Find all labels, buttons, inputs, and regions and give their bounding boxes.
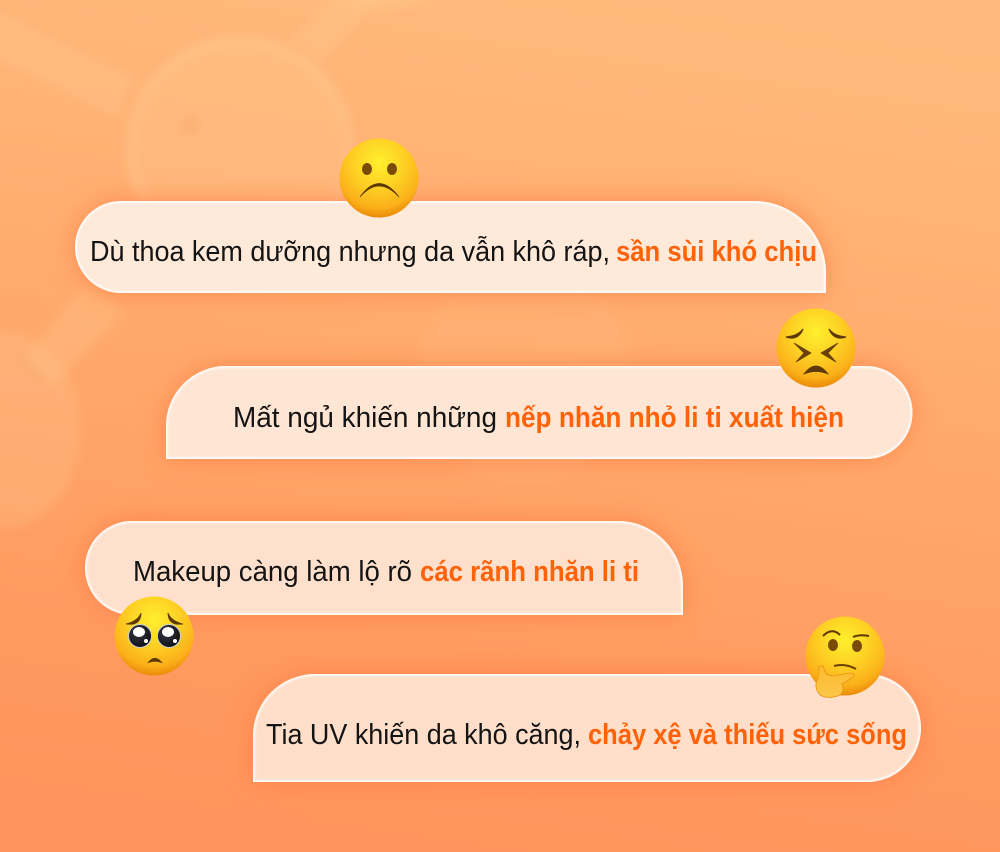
- icon: thinking face emoji: [806, 616, 884, 698]
- text: bubble 1 regular: Dù thoa kem dưỡng nhưng da vẫn khô ráp,: [90, 236, 610, 268]
- text: bubble 2 regular: Mất ngủ khiến những: [233, 402, 497, 434]
- text: bubble 3 highlight: các rãnh nhăn li ti: [420, 556, 639, 588]
- text: bubble 4 highlight: chảy xệ và thiếu sức sống: [588, 719, 907, 751]
- panel: speech bubble 2: [166, 366, 912, 459]
- background molecule illustration: [0, 0, 633, 528]
- text: bubble 4 regular: Tia UV khiến da khô căng,: [266, 719, 581, 751]
- text: bubble 1 highlight: sần sùi khó chịu: [616, 236, 817, 268]
- icon: pleading face emoji: [114, 596, 194, 676]
- icon: persevering face emoji: [776, 308, 856, 388]
- panel: speech bubble 1: [75, 201, 826, 293]
- text: bubble 2 highlight: nếp nhăn nhỏ li ti xuất hiện: [505, 402, 844, 434]
- text: bubble 3 regular: Makeup càng làm lộ rõ: [133, 556, 412, 588]
- panel: speech bubble 3: [85, 521, 683, 615]
- panel: bubble glows: [75, 201, 921, 782]
- icon: frowning face emoji: [340, 138, 418, 218]
- panel: speech bubble 4: [253, 674, 921, 782]
